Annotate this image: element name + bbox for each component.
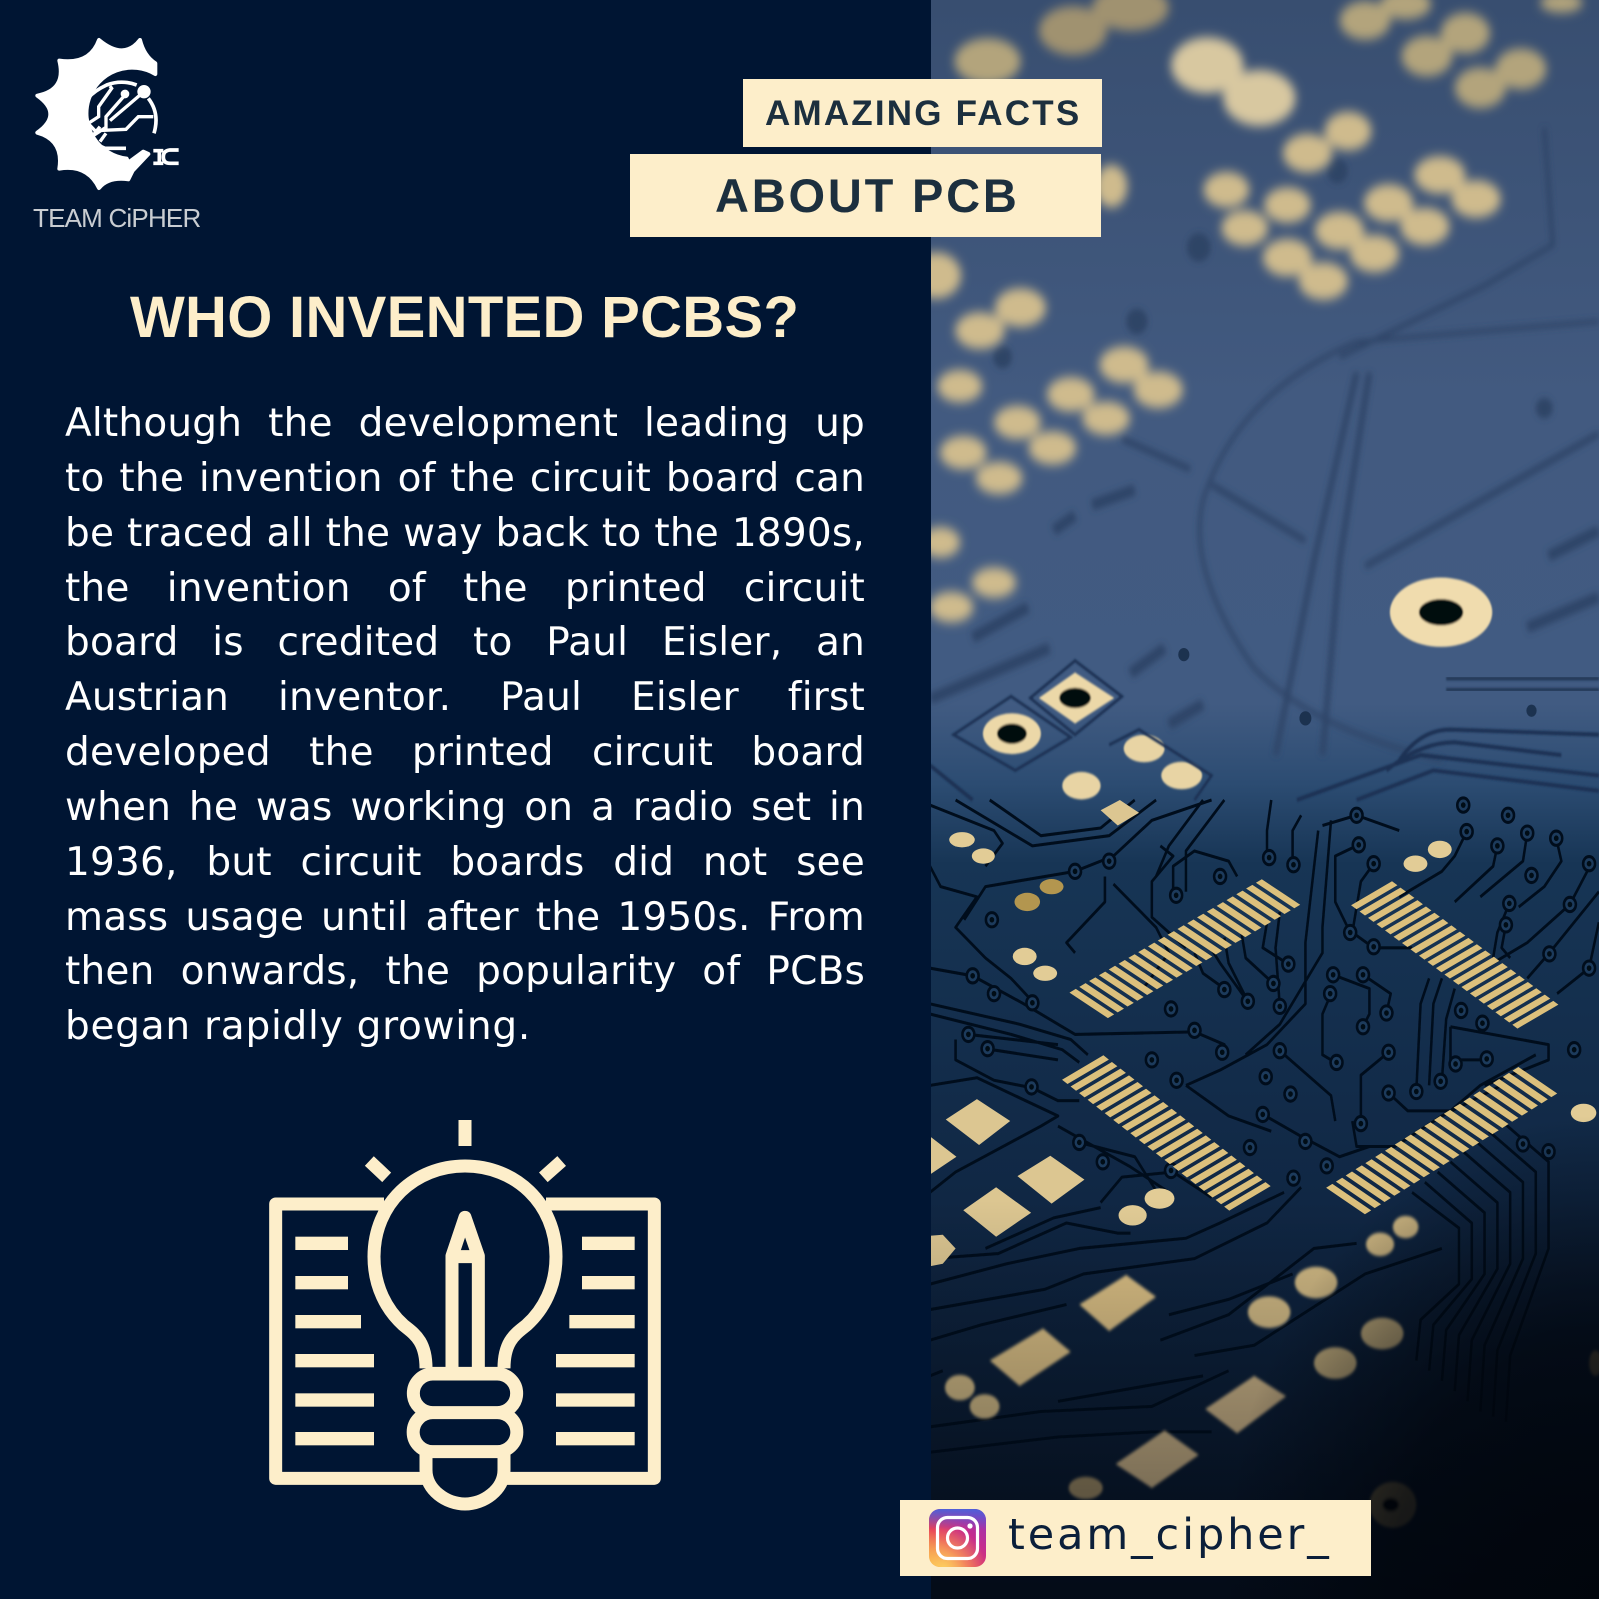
circuit emblem: [82, 82, 156, 148]
body text: then onwards, the popularity of PCBs: [65, 948, 865, 994]
bulb screw base: [413, 1374, 517, 1504]
body text: the invention of the printed circuit: [65, 566, 865, 610]
IC pin rows: [1083, 892, 1538, 1201]
label: about pcb: ABOUT PCB: [715, 169, 1020, 222]
outlines around drill pads: [930, 661, 1599, 800]
bulb outline: [374, 1166, 556, 1373]
gold pads: [930, 800, 1596, 1266]
body text: board is credited to Paul Eisler, an: [65, 620, 865, 664]
logo: Team Cipher gear: [35, 38, 179, 190]
label: amazing facts: [743, 79, 1102, 147]
body text: when he was working on a radio set in: [65, 784, 865, 830]
sharp pads and drill holes: [983, 578, 1492, 799]
instagram handle bar: [900, 1500, 1371, 1576]
dark vignette at the bottom: [931, 1090, 1599, 1599]
body text: [65, 400, 865, 1048]
pencil: [452, 1217, 478, 1368]
body text: be traced all the way back to the 1890s,: [65, 510, 865, 556]
icon: light bulb with pencil over open book: [269, 1120, 661, 1510]
body text: 1936, but circuit boards did not see: [65, 840, 865, 884]
book text lines: [295, 1237, 635, 1445]
heading: WHO INVENTED PCBS?: [130, 285, 799, 350]
gear: [37, 40, 155, 188]
panel: circuit board photo: [931, 0, 1599, 1599]
body text: Although the development leading up: [65, 400, 865, 446]
body text: Austrian inventor. Paul Eisler first: [65, 674, 865, 720]
body text: mass usage until after the 1950s. From: [65, 894, 865, 940]
book outline: [276, 1204, 654, 1478]
icon: instagram: [929, 1509, 986, 1567]
blurred upper board: [912, 0, 1599, 800]
blurred gold pads: [912, 0, 1583, 622]
IC mark: [153, 150, 179, 163]
sharp lower board: [930, 800, 1599, 1528]
body text: to the invention of the circuit board can: [65, 456, 865, 500]
label: amazing facts: AMAZING FACTS: [765, 94, 1081, 133]
label: about pcb: [630, 154, 1101, 237]
body text: began rapidly growing.: [65, 1004, 531, 1048]
via holes: [968, 805, 1589, 1178]
stepped bus lines: [1412, 1121, 1549, 1422]
body text: developed the printed circuit board: [65, 730, 865, 774]
light rays: [369, 1120, 562, 1177]
handle text: team_cipher_: [1008, 1510, 1332, 1560]
circuit traces: [930, 800, 1599, 1452]
logo wordmark: TEAM CiPHER: [33, 203, 200, 233]
